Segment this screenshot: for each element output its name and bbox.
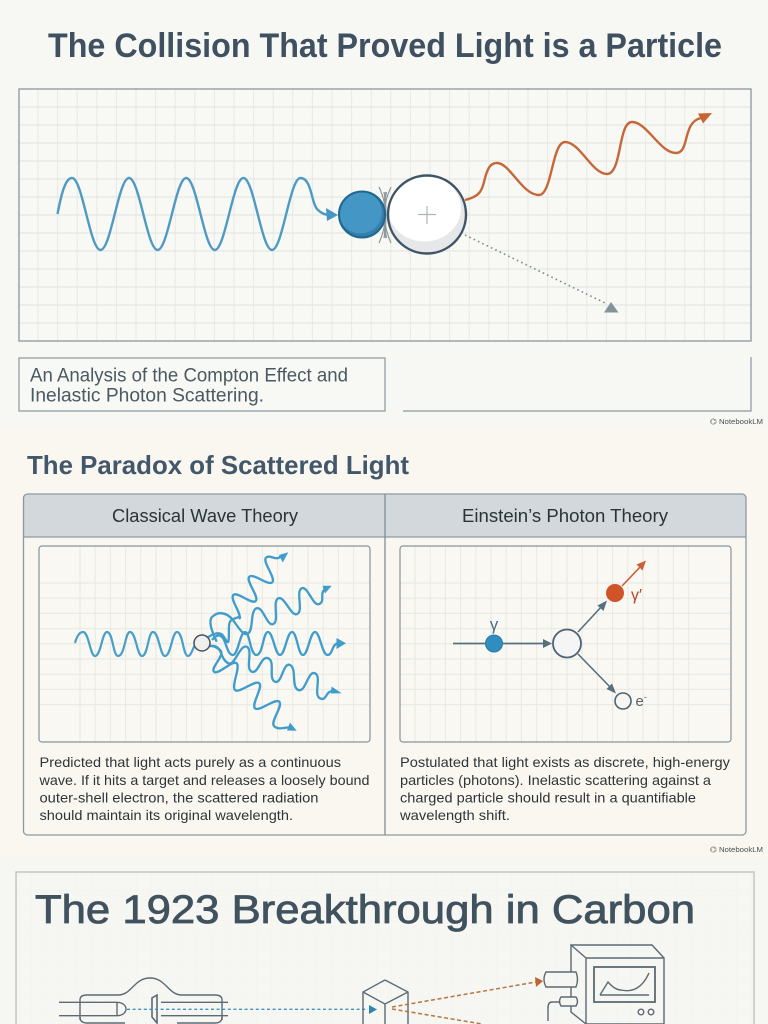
incoming blue wave with arrow [58,178,338,250]
icon: carbon crystal [363,980,408,1024]
blue dashed x-ray beam [127,1005,377,1014]
wave: shallow upward [210,586,332,642]
wave: shallow downward [208,646,342,699]
wave: steep upward [207,552,288,642]
incoming wave [75,632,195,656]
diagram: particle collision [400,546,731,742]
section: paradox slide [24,450,763,854]
comparison table [24,494,746,835]
incoming arrow [453,639,552,648]
diagram: x-ray tube [59,978,228,1023]
lower arrow [578,654,616,694]
icon: spectrometer box [571,945,664,1024]
panel: collision diagram [19,89,751,341]
section: 1923 breakthrough slide [16,872,754,1024]
NotebookLM mark: ⌬ NotebookLM [710,417,763,426]
icon: blue photon [339,192,385,238]
orange scattered beams [392,977,543,1024]
panel frame [16,872,754,1024]
label: electron: e [636,693,644,710]
subtitle box [19,358,385,411]
subtitle box: An Analysis of the Compton Effect and [30,366,348,386]
section: collision slide [19,27,763,426]
icon: target electron [553,630,581,658]
icon: incoming photon [486,635,502,652]
body text: Predicted that light acts purely as a continuous [40,754,341,770]
body text: particles (photons). Inelastic scattering against a [400,772,711,788]
scattered orange wave with arrow [465,113,712,200]
upper arrow [578,600,607,632]
scattered waves [206,552,346,731]
panel: classical wave theory [38,505,370,823]
label: gamma prime: γ′ [631,587,642,604]
wave: straight [212,632,346,655]
body text [399,754,730,823]
label: electron: - [644,692,647,702]
orange arrow [622,560,646,586]
body text: Postulated that light exists as discrete, high-energy [400,754,730,770]
icon: detector [544,972,578,1021]
dotted electron path with arrow [465,235,618,312]
icon: electron target [388,176,466,254]
subtitle box: Inelastic Photon Scattering. [30,386,264,406]
collision impact lines [379,187,391,243]
column heading: Einstein’s Photon Theory [462,505,669,526]
body text: wavelength shift. [399,807,510,823]
body text: charged particle should result in a quantifiable [400,790,696,806]
body text [38,754,370,823]
body text: outer-shell electron, the scattered radiation [40,790,318,806]
panel: einstein's photon theory [399,505,731,823]
heading: The Paradox of Scattered Light [27,450,409,480]
wave: steep downward [206,646,297,731]
heading: The 1923 Breakthrough in Carbon [35,888,695,932]
title: The Collision That Proved Light is a Particle [48,27,722,65]
diagram: wave scattering [39,546,370,742]
icon: recoil electron [615,693,631,709]
NotebookLM mark: ⌬ NotebookLM [710,845,763,854]
body text: should maintain its original wavelength. [40,807,293,823]
column heading: Classical Wave Theory [112,505,299,526]
body text: wave. If it hits a target and releases a loosely bound [38,772,370,788]
icon: target electron [194,635,210,651]
icon: scattered photon [606,584,624,602]
label: gamma: γ [490,615,499,634]
